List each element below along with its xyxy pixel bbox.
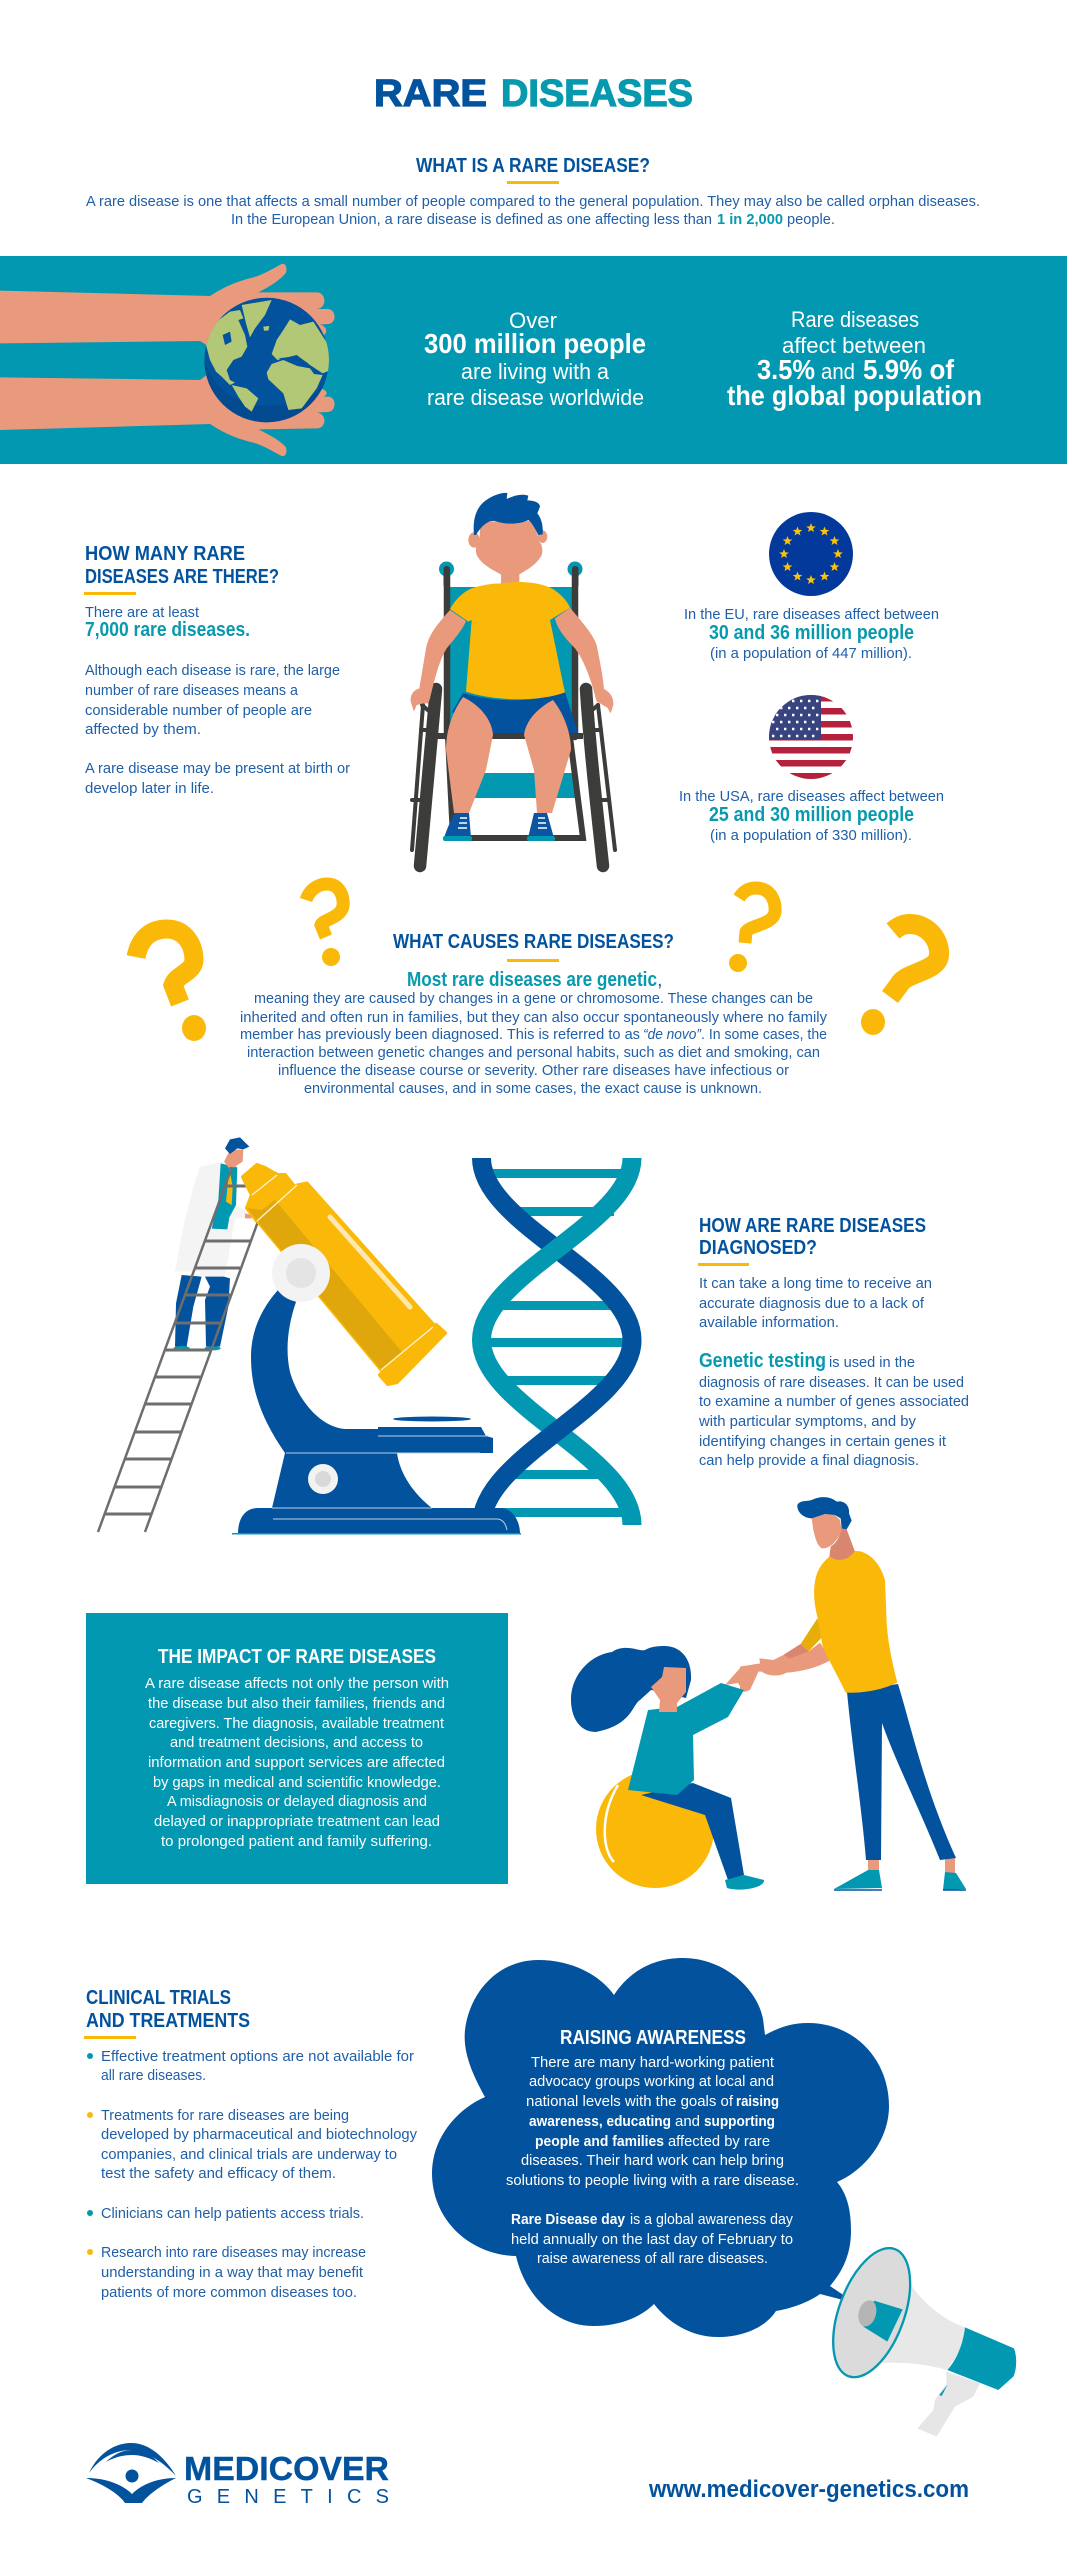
bullet list bbox=[87, 2048, 417, 2301]
icon: hands holding globe bbox=[0, 264, 335, 456]
stat: 3.5% to 5.9% of global population: and bbox=[821, 359, 855, 384]
bullet list: Research into rare diseases may increase bbox=[101, 2244, 366, 2261]
text block: diagnosis: It can take a long time to receive an bbox=[699, 1275, 932, 1292]
heading: clinical trials: CLINICAL TRIALS bbox=[86, 1987, 231, 2009]
microscope bbox=[232, 1165, 521, 1534]
heading: clinical trials bbox=[86, 1987, 250, 2032]
DNA helix bbox=[482, 1158, 632, 1525]
ladder bbox=[98, 1167, 276, 1532]
heading: how are rare diseases diagnosed bbox=[699, 1215, 926, 1259]
definition text: A rare disease is one that affects a small number of people compared to the general population. They may also be called orphan diseases. bbox=[86, 193, 980, 210]
text block: impact: and treatment decisions, and access to bbox=[170, 1734, 423, 1751]
text block: counts: A rare disease may be present at birth or bbox=[85, 760, 350, 777]
text block: rare disease day: is a global awareness day bbox=[630, 2211, 793, 2228]
text block: impact: by gaps in medical and scientific knowledge. bbox=[153, 1774, 441, 1791]
text: USA statistic: 25 and 30 million people bbox=[709, 804, 914, 826]
text: EU statistic bbox=[684, 606, 939, 662]
definition text bbox=[86, 193, 980, 228]
heading: how many rare diseases bbox=[85, 543, 279, 588]
stat: 3.5% to 5.9% of global population bbox=[727, 307, 982, 411]
stat: 300 million people: rare disease worldwide bbox=[427, 385, 644, 410]
illustration: doctor on ladder with microscope bbox=[98, 1137, 632, 1534]
text block: advocacy: There are many hard-working patient bbox=[531, 2054, 775, 2071]
text block: causes: influence the disease course or severity. Other rare diseases have infectious or bbox=[278, 1062, 789, 1079]
logo wordmark bbox=[184, 2450, 389, 2508]
website url: www.medicover-genetics.com bbox=[648, 2476, 969, 2503]
text block: impact bbox=[145, 1675, 449, 1850]
text block: counts: develop later in life. bbox=[85, 780, 214, 797]
title: RARE bbox=[374, 73, 487, 115]
text block: counts: considerable number of people are bbox=[85, 702, 312, 719]
subheading: most are genetic: Most rare diseases are genetic bbox=[407, 969, 657, 991]
text block: rare disease day: raise awareness of all rare diseases. bbox=[537, 2250, 768, 2267]
stat: 3.5% to 5.9% of global population: 5.9% of bbox=[863, 354, 955, 385]
icon: EU flag bbox=[769, 512, 853, 596]
text block: diagnosis: can help provide a final diagnosis. bbox=[699, 1452, 919, 1469]
text block: advocacy: solutions to people living with a rare disease. bbox=[506, 2172, 799, 2189]
bullet list: all rare diseases. bbox=[101, 2067, 206, 2084]
text block: diagnosis bbox=[698, 1275, 969, 1469]
bullet list: companies, and clinical trials are underway to bbox=[101, 2146, 397, 2163]
text block: counts bbox=[85, 604, 350, 797]
text block: impact: information and support services are affected bbox=[148, 1754, 445, 1771]
text block: impact: the disease but also their families, friends and bbox=[148, 1695, 445, 1712]
text block: diagnosis: Genetic testing bbox=[699, 1350, 826, 1372]
subheading: most are genetic: , bbox=[657, 969, 663, 991]
logo: Medicover Genetics bbox=[86, 2443, 389, 2508]
text block: advocacy: raising bbox=[736, 2093, 779, 2110]
wheelchair bbox=[412, 562, 615, 866]
text block: rare disease day bbox=[511, 2211, 793, 2267]
text block: causes: member has previously been diagnosed. This is referred to as bbox=[240, 1026, 640, 1043]
stat: 3.5% to 5.9% of global population: affect between bbox=[782, 333, 926, 358]
text block: causes: . In some cases, the bbox=[701, 1026, 827, 1043]
text block: causes: environmental causes, and in some cases, the exact cause is unknown. bbox=[304, 1080, 762, 1097]
text: EU statistic: (in a population of 447 million). bbox=[710, 645, 912, 662]
text block: counts: Although each disease is rare, the large bbox=[85, 662, 340, 679]
definition text: people. bbox=[787, 211, 835, 228]
text block: diagnosis: accurate diagnosis due to a lack of bbox=[699, 1295, 925, 1312]
icon: globe bbox=[203, 298, 331, 423]
heading: how many rare diseases: DISEASES ARE THERE? bbox=[85, 566, 279, 588]
stat: 300 million people bbox=[424, 308, 646, 410]
text: USA statistic: (in a population of 330 million). bbox=[710, 827, 912, 844]
text block: counts: number of rare diseases means a bbox=[85, 682, 299, 699]
stat: 300 million people: 300 million people bbox=[424, 328, 646, 359]
section: how many rare diseases bbox=[84, 543, 350, 797]
heading: impact: THE IMPACT OF RARE DISEASES bbox=[158, 1646, 436, 1668]
text block: causes bbox=[240, 990, 827, 1097]
icon: USA flag bbox=[769, 695, 853, 780]
man bbox=[740, 1497, 966, 1890]
bullet list: Clinicians can help patients access trials. bbox=[101, 2205, 364, 2222]
text block: counts: affected by them. bbox=[85, 721, 201, 738]
text block: diagnosis: identifying changes in certain genes it bbox=[699, 1433, 947, 1450]
text block: advocacy: diseases. Their hard work can help bring bbox=[521, 2152, 784, 2169]
heading: clinical trials: AND TREATMENTS bbox=[86, 2010, 250, 2032]
illustration: boy in wheelchair bbox=[411, 493, 615, 866]
boy bbox=[411, 493, 613, 841]
bullet list: patients of more common diseases too. bbox=[101, 2284, 357, 2301]
bullet list: Effective treatment options are not available for bbox=[101, 2048, 414, 2065]
bullet list: understanding in a way that may benefit bbox=[101, 2264, 364, 2281]
heading: how are rare diseases diagnosed: HOW ARE RARE DISEASES bbox=[699, 1215, 926, 1237]
definition text: 1 in 2,000 bbox=[717, 211, 783, 228]
text block: diagnosis: diagnosis of rare diseases. It can be used bbox=[699, 1374, 964, 1391]
text: USA statistic: In the USA, rare diseases affect between bbox=[679, 788, 944, 805]
title bbox=[374, 73, 693, 115]
heading: how are rare diseases diagnosed: DIAGNOSED? bbox=[699, 1237, 817, 1259]
text block: advocacy: awareness, educating bbox=[529, 2113, 671, 2130]
text block: impact: delayed or inappropriate treatment can lead bbox=[154, 1813, 440, 1830]
stat: 3.5% to 5.9% of global population: 3.5% bbox=[757, 354, 815, 385]
bullet list: test the safety and efficacy of them. bbox=[101, 2165, 336, 2182]
stat: 3.5% to 5.9% of global population: the global population bbox=[727, 380, 982, 411]
heading: what causes rare diseases: WHAT CAUSES RARE DISEASES? bbox=[393, 931, 674, 953]
text block: advocacy: people and families bbox=[535, 2133, 664, 2150]
panel: impact of rare diseases bbox=[86, 1613, 508, 1884]
section: EU and USA statistics bbox=[679, 512, 944, 844]
heading: what is a rare disease: WHAT IS A RARE DISEASE? bbox=[416, 155, 650, 177]
logo wordmark: GENETICS bbox=[187, 2486, 389, 2508]
text block: advocacy bbox=[506, 2054, 799, 2189]
text block: causes: inherited and often run in families, but they can also occur spontaneously where no family bbox=[240, 1009, 827, 1026]
section: clinical trials and treatments bbox=[84, 1987, 417, 2301]
text block: counts: There are at least bbox=[85, 604, 200, 621]
bullet list: developed by pharmaceutical and biotechnology bbox=[101, 2126, 417, 2143]
panel: raising awareness speech bubble bbox=[432, 1958, 889, 2337]
definition text: In the European Union, a rare disease is defined as one affecting less than bbox=[231, 211, 712, 228]
icons: question marks bbox=[136, 884, 939, 1041]
section: what causes rare diseases bbox=[240, 931, 827, 1097]
stat: 300 million people: are living with a bbox=[461, 359, 610, 384]
logo mark bbox=[86, 2443, 176, 2503]
section: what is a rare disease bbox=[86, 155, 980, 228]
text: USA statistic bbox=[679, 788, 944, 844]
stat: 3.5% to 5.9% of global population: Rare diseases bbox=[791, 307, 919, 332]
text block: diagnosis: available information. bbox=[699, 1314, 839, 1331]
doctor bbox=[174, 1137, 252, 1351]
title: DISEASES bbox=[501, 73, 693, 115]
text block: causes: interaction between genetic changes and personal habits, such as diet and smoking, can bbox=[247, 1044, 820, 1061]
text block: impact: A misdiagnosis or delayed diagnosis and bbox=[167, 1793, 427, 1810]
heading: how many rare diseases: HOW MANY RARE bbox=[85, 543, 245, 565]
text block: advocacy: advocacy groups working at local and bbox=[529, 2073, 774, 2090]
section: how are rare diseases diagnosed bbox=[698, 1215, 969, 1469]
text block: impact: A rare disease affects not only the person with bbox=[145, 1675, 449, 1692]
text block: rare disease day: Rare Disease day bbox=[511, 2211, 626, 2228]
text block: rare disease day: held annually on the last day of February to bbox=[511, 2231, 793, 2248]
text block: counts: 7,000 rare diseases. bbox=[85, 619, 250, 641]
logo wordmark: MEDICOVER bbox=[184, 2450, 389, 2487]
text block: advocacy: national levels with the goals of bbox=[526, 2093, 734, 2110]
girl and ball bbox=[571, 1646, 764, 1890]
text block: causes: meaning they are caused by changes in a gene or chromosome. These changes can be bbox=[254, 990, 813, 1007]
text: EU statistic: 30 and 36 million people bbox=[709, 622, 914, 644]
panel: global statistics banner bbox=[0, 256, 1067, 464]
text block: impact: caregivers. The diagnosis, available treatment bbox=[149, 1715, 445, 1732]
text: EU statistic: In the EU, rare diseases affect between bbox=[684, 606, 939, 623]
text block: causes: “de novo” bbox=[643, 1026, 702, 1043]
stat: 300 million people: Over bbox=[509, 308, 557, 333]
text block: diagnosis: with particular symptoms, and by bbox=[698, 1413, 916, 1430]
illustration: adult helping girl on exercise ball bbox=[571, 1497, 966, 1890]
heading: raising awareness: RAISING AWARENESS bbox=[560, 2027, 746, 2049]
bullet list: Treatments for rare diseases are being bbox=[101, 2107, 349, 2124]
text block: advocacy: and bbox=[675, 2113, 700, 2130]
text block: impact: to prolonged patient and family suffering. bbox=[161, 1833, 432, 1850]
text block: advocacy: supporting bbox=[704, 2113, 775, 2130]
text block: diagnosis: to examine a number of genes associated bbox=[699, 1393, 969, 1410]
text block: diagnosis: is used in the bbox=[829, 1354, 915, 1371]
text block: advocacy: affected by rare bbox=[668, 2133, 770, 2150]
icon: megaphone bbox=[818, 2238, 1016, 2437]
